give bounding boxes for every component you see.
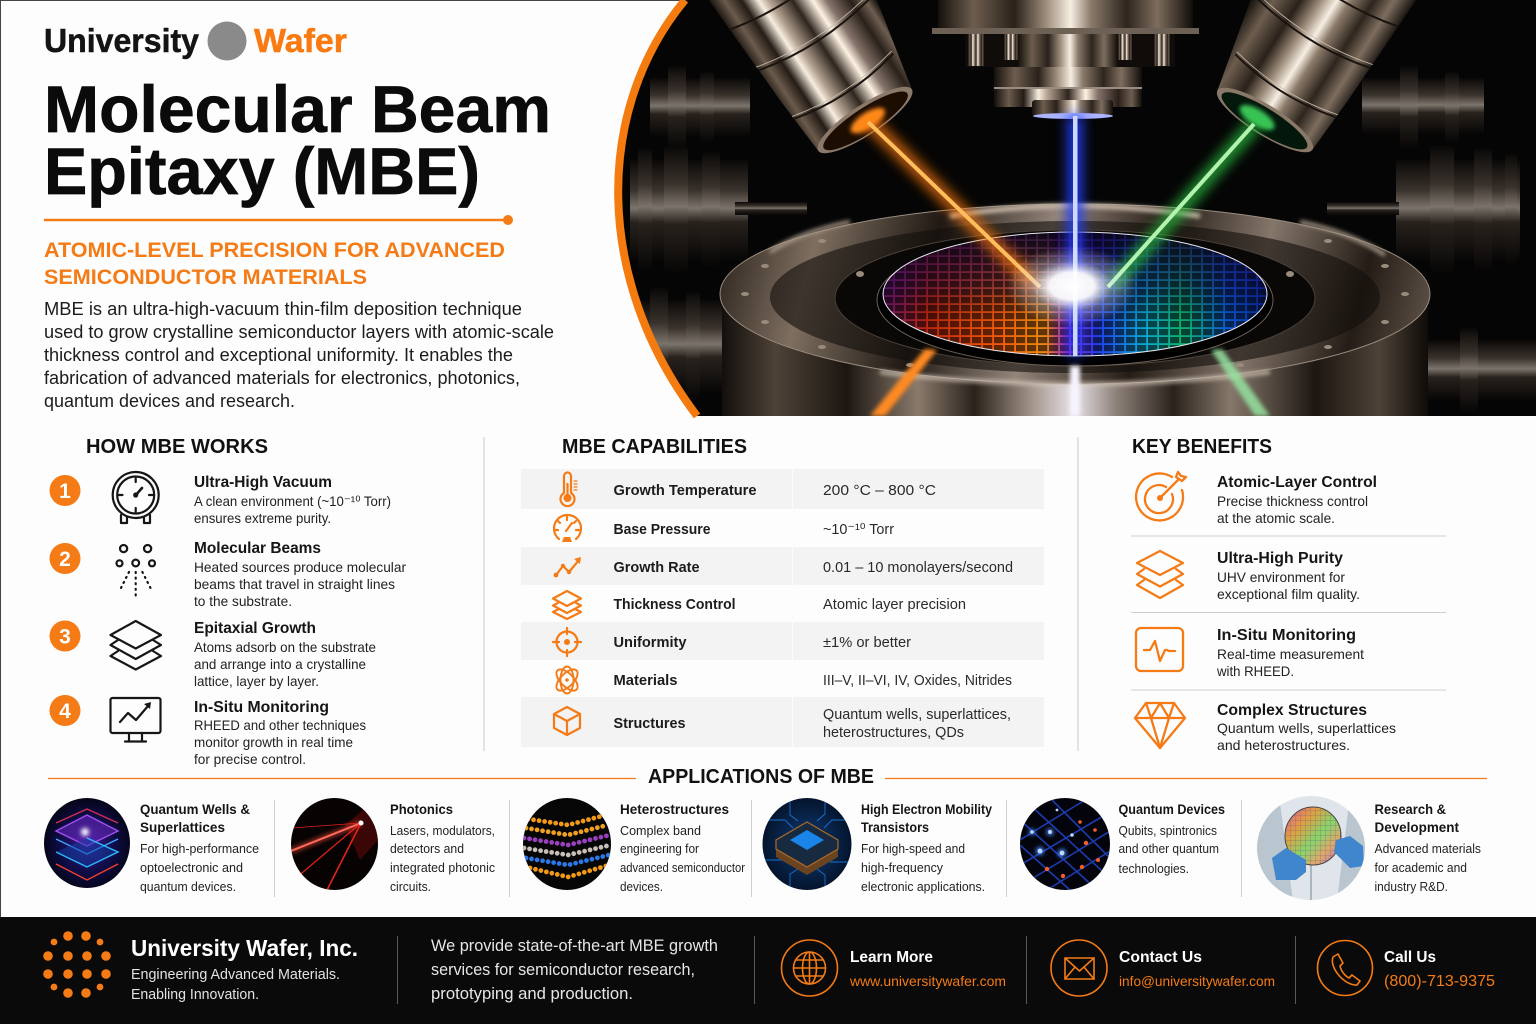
intro paragraph — [44, 298, 554, 411]
subtitle — [44, 238, 505, 289]
call us — [1318, 940, 1495, 996]
row: structures: Quantum wells, superlattices, — [823, 706, 1011, 723]
side ports left — [630, 66, 807, 404]
application: quantum wells: optoelectronic and — [140, 860, 243, 875]
benefit: in-situ monitoring: In-Situ Monitoring — [1217, 627, 1356, 644]
step 2 — [50, 540, 406, 609]
subtitle: ATOMIC-LEVEL PRECISION FOR ADVANCED — [44, 238, 505, 262]
step 1 — [50, 472, 391, 526]
step 2: beams that travel in straight lines — [194, 577, 395, 592]
logo — [44, 22, 347, 60]
row: materials: Materials — [614, 672, 678, 689]
application: HEMT: High Electron Mobility — [861, 801, 992, 817]
row: materials — [553, 666, 1012, 694]
application: photonics: integrated photonic — [390, 860, 495, 875]
step 3: Atoms adsorb on the substrate — [194, 640, 376, 655]
logo: Wafer — [254, 22, 347, 59]
row: materials: III–V, II–VI, IV, Oxides, Nitrides — [823, 672, 1012, 689]
benefit: complex structures — [1135, 702, 1396, 753]
row: uniformity: ±1% or better — [823, 634, 911, 651]
row: growth rate: Growth Rate — [614, 559, 700, 576]
step 4: RHEED and other techniques — [194, 718, 366, 733]
application: quantum devices: technologies. — [1118, 861, 1189, 876]
intro paragraph: fabrication of advanced materials for electronics, photonics, — [44, 367, 520, 388]
benefit: ultra-high purity: Ultra-High Purity — [1217, 550, 1343, 567]
benefit: complex structures: Complex Structures — [1217, 702, 1367, 719]
sample stage — [720, 204, 1430, 416]
step 4: for precise control. — [194, 752, 306, 767]
footer description: prototyping and production. — [431, 985, 633, 1003]
footer description: We provide state-of-the-art MBE growth — [431, 937, 718, 955]
row: growth rate — [554, 557, 1013, 577]
benefit: in-situ monitoring: Real-time measurement — [1217, 647, 1364, 662]
application: quantum devices: Quantum Devices — [1118, 801, 1225, 817]
right source cylinder — [1216, 0, 1416, 152]
row: uniformity: Uniformity — [614, 634, 687, 651]
row: base pressure: Base Pressure — [614, 521, 710, 538]
step 1: 1 — [59, 480, 71, 503]
application: quantum devices: Qubits, spintronics — [1118, 823, 1217, 838]
center source column — [932, 0, 1199, 119]
application: photonics: Lasers, modulators, — [390, 823, 495, 838]
application: research and development: Development — [1374, 819, 1459, 835]
application: research and development: Advanced materials — [1374, 841, 1481, 856]
benefit: atomic-layer control: Precise thickness control — [1217, 494, 1368, 509]
row: thickness control — [553, 591, 966, 619]
benefit: atomic-layer control: at the atomic scale. — [1217, 511, 1335, 526]
application: HEMT: For high-speed and — [861, 841, 965, 856]
row: thickness control: Thickness Control — [614, 596, 736, 613]
step 3: Epitaxial Growth — [194, 620, 316, 637]
step 1: ensures extreme purity. — [194, 511, 331, 526]
call us: Call Us — [1384, 949, 1436, 966]
left source cylinder — [709, 0, 912, 154]
step 3: 3 — [59, 626, 71, 648]
learn more — [782, 940, 1006, 996]
application: heterostructures: devices. — [620, 879, 663, 894]
application: heterostructures: Heterostructures — [620, 801, 729, 817]
row: growth temperature: 200 °C – 800 °C — [823, 482, 936, 499]
application: photonics — [288, 795, 495, 894]
application: heterostructures: engineering for — [620, 841, 700, 856]
footer description: services for semiconductor research, — [431, 961, 695, 979]
orange curved edge — [618, 0, 697, 416]
benefit: atomic-layer control: Atomic-Layer Control — [1217, 474, 1377, 491]
panel: applications of MBE — [40, 765, 1487, 901]
footer logo dots — [43, 931, 111, 998]
application: quantum devices: and other quantum — [1118, 841, 1219, 856]
step 4: 4 — [59, 700, 71, 723]
application: quantum wells: Superlattices — [140, 819, 225, 835]
application: photonics: Photonics — [390, 801, 453, 817]
application: research and development — [1255, 795, 1481, 901]
benefit: ultra-high purity: UHV environment for — [1217, 570, 1345, 585]
intro paragraph: used to grow crystalline semiconductor layers with atomic-scale — [44, 321, 554, 342]
row: growth rate: 0.01 – 10 monolayers/second — [823, 559, 1013, 576]
row: growth temperature: Growth Temperature — [614, 482, 756, 499]
contact us: Contact Us — [1119, 949, 1202, 966]
application: heterostructures: Complex band — [620, 823, 701, 838]
step 2: Molecular Beams — [194, 540, 321, 557]
step 2: Heated sources produce molecular — [194, 560, 406, 575]
panel: how MBE works — [50, 435, 406, 767]
panel: key benefits — [1131, 435, 1446, 753]
table backgrounds — [521, 469, 1044, 747]
title — [44, 72, 551, 208]
application: HEMT: electronic applications. — [861, 879, 985, 894]
step 3: lattice, layer by layer. — [194, 674, 319, 689]
row: uniformity — [553, 628, 911, 656]
application: quantum wells: Quantum Wells & — [140, 801, 250, 817]
heading: HOW MBE WORKS — [86, 435, 268, 458]
footer company text: Enabling Innovation. — [131, 986, 259, 1003]
row: growth temperature — [560, 472, 936, 506]
row: thickness control: Atomic layer precision — [823, 596, 966, 613]
application: quantum wells — [40, 795, 259, 894]
learn more: www.universitywafer.com — [849, 973, 1006, 989]
benefit: atomic-layer control — [1136, 472, 1377, 526]
application: research and development: for academic and — [1374, 860, 1467, 875]
benefit: complex structures: and heterostructures. — [1217, 738, 1350, 753]
application: photonics: detectors and — [390, 841, 464, 856]
application: photonics: circuits. — [390, 879, 431, 894]
application: HEMT: high-frequency — [861, 860, 943, 875]
application: quantum wells: For high-performance — [140, 841, 259, 856]
application: quantum wells: quantum devices. — [140, 879, 236, 894]
step 3 — [50, 620, 376, 689]
row: structures: heterostructures, QDs — [823, 724, 964, 741]
footer company text — [131, 935, 358, 1003]
application: heterostructures — [520, 795, 746, 894]
step 1: A clean environment (~10⁻¹⁰ Torr) — [194, 494, 391, 509]
hero image: MBE chamber with beams and wafer — [600, 0, 1536, 416]
benefit: complex structures: Quantum wells, superlattices — [1217, 721, 1396, 736]
panel: MBE capabilities — [521, 435, 1044, 747]
application: heterostructures: advanced semiconductor — [620, 860, 746, 875]
row: base pressure — [554, 515, 894, 542]
row: structures — [554, 706, 1011, 741]
side ports right — [1327, 66, 1536, 412]
contact us: info@universitywafer.com — [1119, 973, 1275, 989]
heading: MBE CAPABILITIES — [562, 435, 747, 458]
step 2: 2 — [59, 548, 71, 571]
intro paragraph: thickness control and exceptional uniformity. It enables the — [44, 344, 513, 365]
step 4: monitor growth in real time — [194, 735, 353, 750]
logo: University — [44, 22, 200, 59]
title: Epitaxy (MBE) — [44, 134, 480, 208]
heading: APPLICATIONS OF MBE — [648, 765, 874, 788]
title rule — [44, 215, 513, 225]
benefit: ultra-high purity: exceptional film quality. — [1217, 587, 1360, 602]
wafer — [883, 232, 1267, 356]
application: quantum devices — [1016, 795, 1225, 893]
footer bar — [0, 917, 1536, 1024]
contact us — [1051, 940, 1275, 996]
step 4: In-Situ Monitoring — [194, 699, 329, 716]
intro paragraph: quantum devices and research. — [44, 390, 295, 411]
benefit: ultra-high purity — [1137, 550, 1360, 602]
heading: KEY BENEFITS — [1132, 435, 1272, 458]
application: HEMT: Transistors — [861, 819, 929, 835]
step 1: Ultra-High Vacuum — [194, 474, 332, 491]
intro paragraph: MBE is an ultra-high-vacuum thin-film deposition technique — [44, 298, 522, 319]
step 4 — [50, 695, 366, 767]
step 3: and arrange into a crystalline — [194, 657, 366, 672]
benefit: in-situ monitoring — [1136, 627, 1364, 679]
benefit: in-situ monitoring: with RHEED. — [1216, 664, 1294, 679]
step 2: to the substrate. — [194, 594, 292, 609]
call us: (800)-713-9375 — [1384, 973, 1495, 990]
application: HEMT — [760, 795, 992, 894]
footer company text: Engineering Advanced Materials. — [131, 966, 340, 983]
application: research and development: Research & — [1374, 801, 1446, 817]
footer description — [431, 937, 718, 1003]
beams — [862, 116, 1270, 416]
logo wafer disc — [208, 22, 246, 60]
row: base pressure: ~10⁻¹⁰ Torr — [823, 521, 894, 538]
title: Molecular Beam — [44, 72, 551, 146]
row: structures: Structures — [614, 715, 686, 732]
application: research and development: industry R&D. — [1374, 879, 1448, 894]
subtitle: SEMICONDUCTOR MATERIALS — [44, 265, 367, 289]
learn more: Learn More — [850, 949, 933, 966]
footer company text: University Wafer, Inc. — [131, 935, 358, 961]
